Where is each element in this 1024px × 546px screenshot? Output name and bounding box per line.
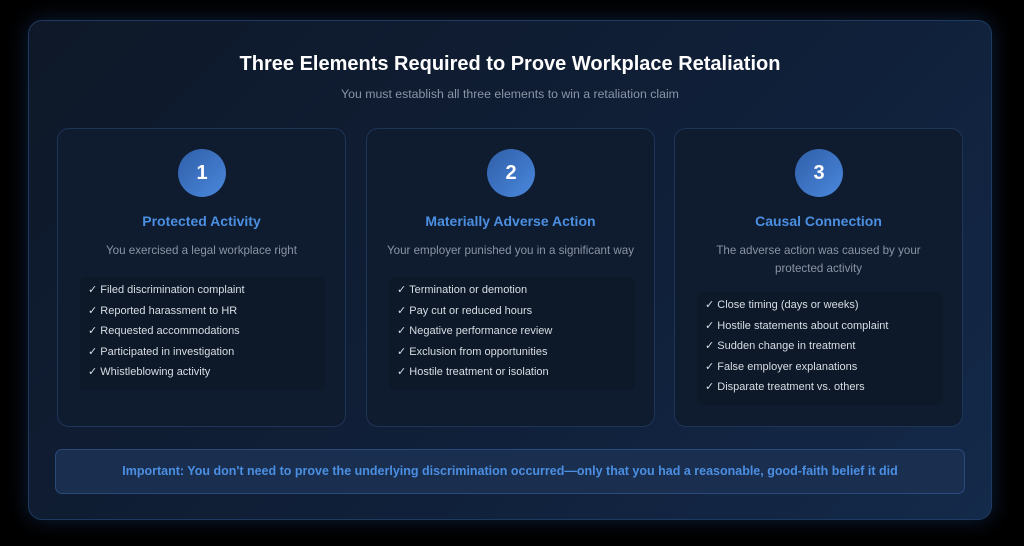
list: ✓ Close timing (days or weeks): [705, 299, 858, 311]
icon: number 2: 2: [505, 162, 517, 184]
heading: Protected Activity: [142, 213, 261, 229]
list: [697, 292, 943, 405]
callout: important note: [55, 449, 965, 494]
list: ✓ Negative performance review: [397, 325, 552, 337]
list: [389, 277, 635, 390]
heading: Causal Connection: [755, 213, 882, 229]
heading: Materially Adverse Action: [425, 213, 596, 229]
list: ✓ Participated in investigation: [88, 346, 234, 358]
panel: adverse action: [366, 128, 655, 427]
list: ✓ Filed discrimination complaint: [88, 284, 245, 296]
title: Three Elements Required to Prove Workplace Retaliation: [240, 53, 780, 75]
description: The adverse action was caused by your protected activity: [716, 244, 921, 275]
list: ✓ Termination or demotion: [397, 284, 527, 296]
list: [80, 277, 326, 390]
panel: causal connection: [674, 128, 963, 427]
description: You exercised a legal workplace right: [106, 244, 297, 257]
icon: number 2: [487, 149, 535, 197]
list: ✓ Requested accommodations: [88, 325, 240, 337]
list: ✓ Hostile statements about complaint: [705, 320, 888, 332]
list: ✓ Disparate treatment vs. others: [705, 381, 865, 393]
list: ✓ Reported harassment to HR: [88, 304, 237, 316]
list: ✓ Whistleblowing activity: [88, 366, 210, 378]
icon: number 1: [178, 149, 226, 197]
list: ✓ Exclusion from opportunities: [397, 346, 547, 358]
icon: number 1: 1: [196, 162, 208, 184]
description: Your employer punished you in a significant way: [387, 244, 634, 257]
list: ✓ Pay cut or reduced hours: [397, 304, 532, 316]
panel: protected activity: [57, 128, 346, 427]
icon: number 3: [795, 149, 843, 197]
icon: number 3: 3: [813, 162, 825, 184]
subtitle: You must establish all three elements to win a retaliation claim: [341, 87, 679, 101]
list: ✓ False employer explanations: [705, 360, 857, 372]
list: ✓ Sudden change in treatment: [705, 340, 855, 352]
list: ✓ Hostile treatment or isolation: [397, 366, 549, 378]
callout: important note: Important: You don't need to prove the underlying discrimination occurred—only that you had a reasonable, good-faith belief it did: [122, 464, 898, 478]
